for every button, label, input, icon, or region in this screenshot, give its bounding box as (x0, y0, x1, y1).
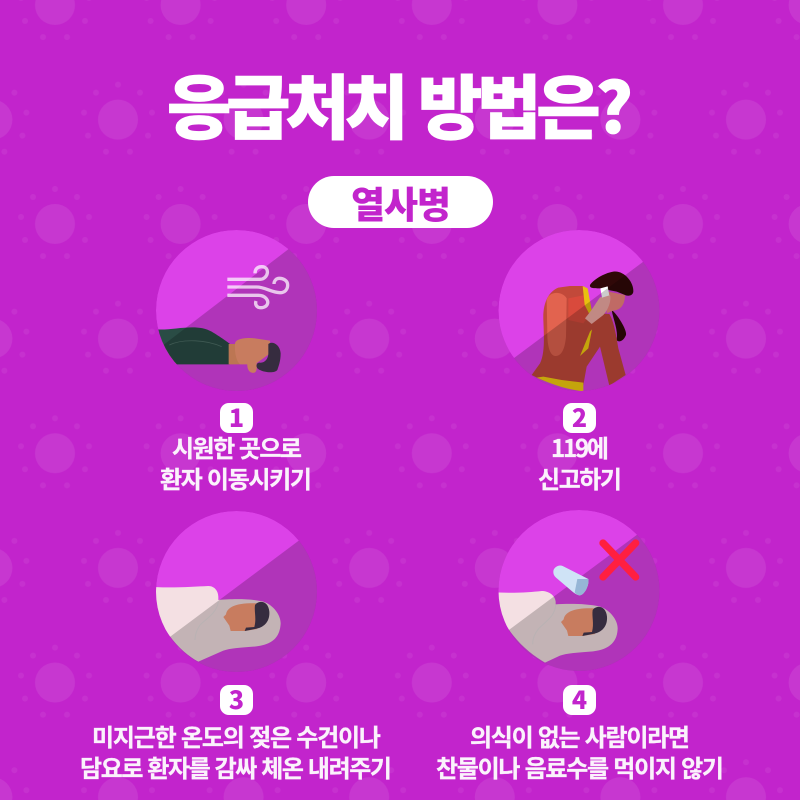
step 1 caption: 환자 이동시키기 (160, 460, 312, 495)
panel: step 4 illustration, no drinks for unconscious patient (498, 510, 660, 671)
icon: glass of water (553, 566, 588, 595)
step 1 caption (160, 429, 312, 495)
category pill: 열사병 (308, 175, 493, 229)
step 4 caption: 의식이 없는 사람이라면 (470, 718, 690, 753)
step 4 caption (436, 718, 724, 784)
step 3 number badge (220, 681, 253, 717)
step 2 number badge: 2 (572, 399, 587, 435)
category pill: 열사병: 열사병 (351, 175, 451, 229)
step 4 number badge (563, 681, 596, 717)
step 3 caption (80, 718, 392, 784)
step 2 number badge (563, 399, 596, 435)
step 4 caption: 찬물이나 음료수를 먹이지 않기 (436, 749, 724, 784)
step 1 number badge: 1 (229, 399, 244, 435)
icon: wind (227, 267, 288, 308)
panel: step 2 illustration, calling 119 (498, 230, 660, 391)
step 1 caption: 시원한 곳으로 (172, 429, 302, 464)
step 4 number badge: 4 (572, 681, 587, 717)
step 2 caption: 신고하기 (538, 460, 622, 495)
panel: step 3 illustration, covering patient with wet towel (156, 511, 317, 672)
icon: red X (603, 543, 636, 577)
step 3 caption: 담요로 환자를 감싸 체온 내려주기 (80, 749, 392, 784)
step 2 caption: 119에 (551, 429, 609, 464)
step 3 caption: 미지근한 온도의 젖은 수건이나 (92, 718, 381, 753)
step 3 number badge: 3 (229, 681, 244, 717)
step 2 caption (538, 429, 622, 495)
title: 응급처치 방법은? (167, 53, 633, 154)
step 1 number badge (220, 399, 253, 435)
panel: step 1 illustration, moving patient to a cool place (156, 230, 317, 391)
